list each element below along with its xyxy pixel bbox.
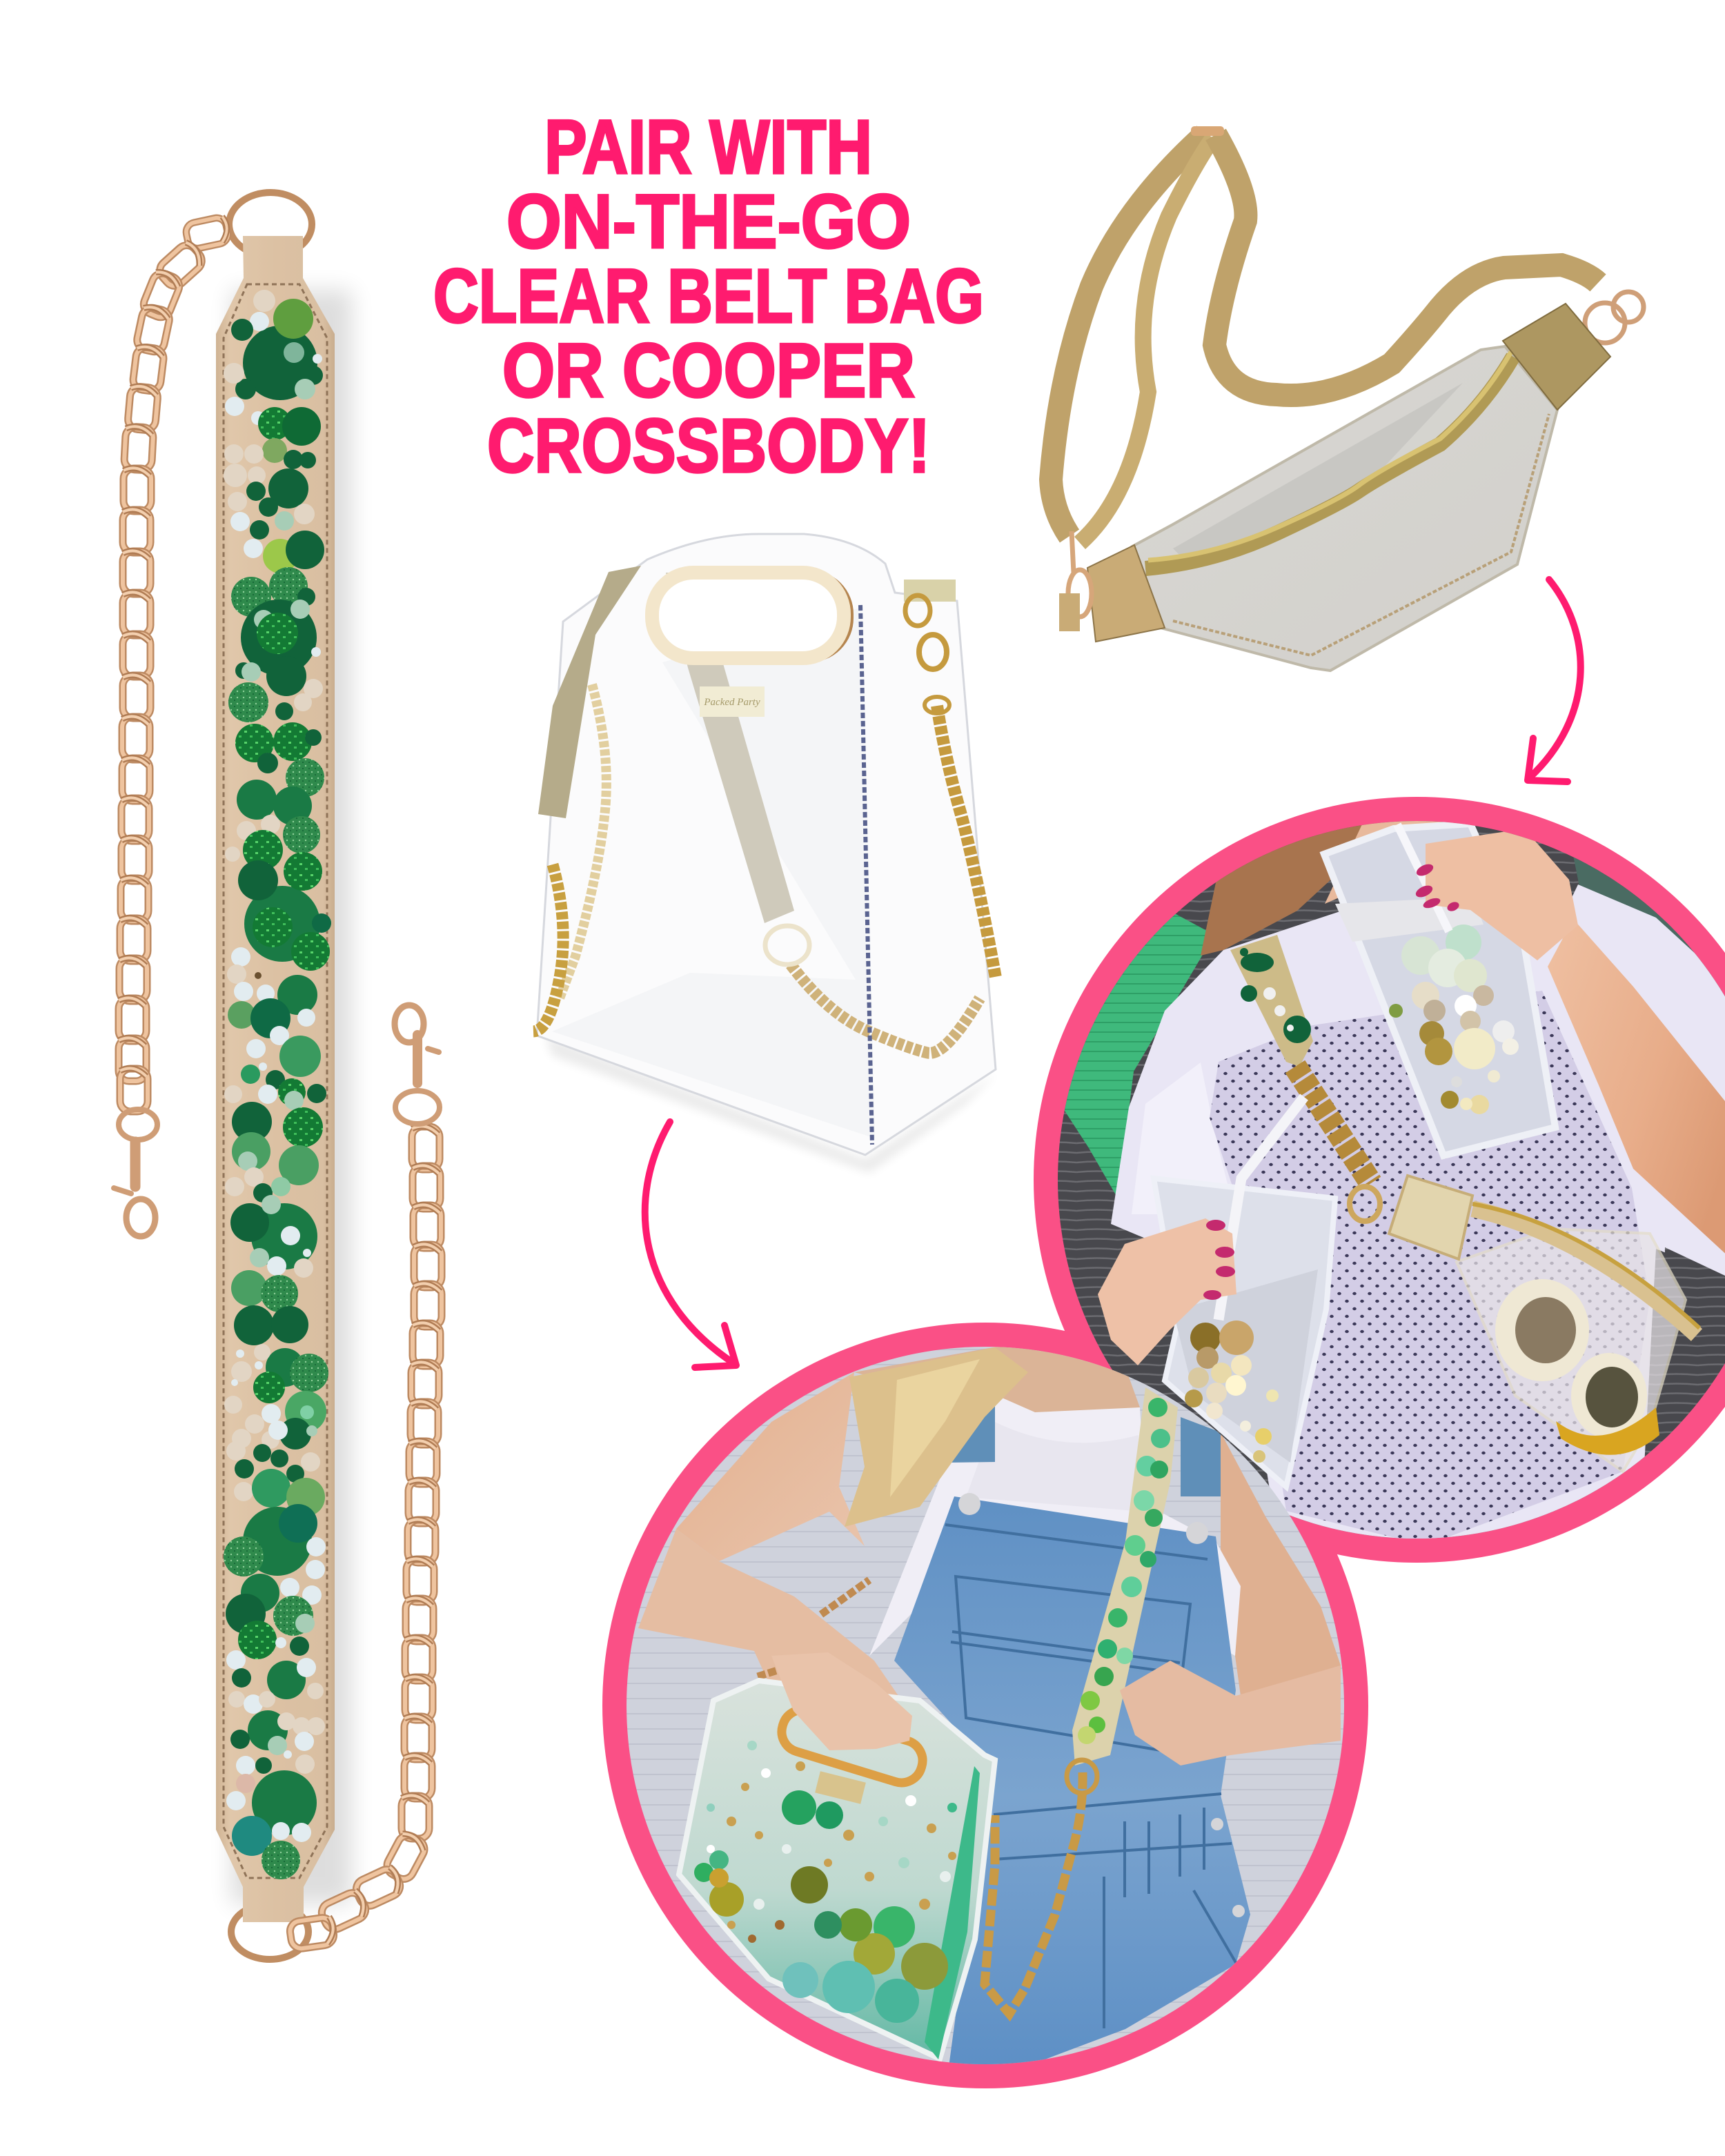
bottom ring <box>231 1904 308 1959</box>
right leather patch <box>1503 304 1610 410</box>
sequins confetti <box>224 290 331 1879</box>
green wall paint <box>1064 913 1206 1195</box>
bag inner reflection <box>552 607 875 1138</box>
lower chain clasp <box>395 1005 440 1124</box>
sunglasses <box>1495 1279 1647 1438</box>
pouch reflection <box>1173 1269 1318 1463</box>
top ring <box>229 192 312 256</box>
worn zipper <box>1472 1209 1697 1335</box>
waistband <box>994 1794 1242 2028</box>
strap ring <box>765 926 809 965</box>
zipper <box>1145 352 1513 568</box>
teal wall top right <box>1573 857 1725 996</box>
right hand on strap <box>1120 1661 1341 1766</box>
top hand <box>1426 829 1578 960</box>
photo: clear bag lifestyle <box>607 1332 1366 2097</box>
lower chain <box>289 1126 442 1950</box>
shirt fold <box>1132 1062 1235 1214</box>
worn strap confetti <box>1240 948 1311 1043</box>
right strap tab and clasp <box>904 580 956 713</box>
top pouch <box>1324 824 1555 1156</box>
inner reflection <box>1173 383 1463 562</box>
straw bottom <box>1219 1097 1304 1320</box>
bag shadow <box>545 1035 997 1173</box>
overall buckles <box>958 1493 1245 1917</box>
left denim strap <box>942 1394 995 1463</box>
top pouch seal <box>1335 897 1483 942</box>
top nails <box>1416 864 1459 911</box>
strap inner loop <box>1080 138 1213 543</box>
zipper teeth <box>1472 1204 1699 1328</box>
strap drop shadow <box>231 290 352 1904</box>
bag clear body <box>537 534 996 1155</box>
hair <box>845 1347 1028 1527</box>
worn chain <box>985 1772 1083 2014</box>
lower seam <box>1173 414 1549 655</box>
right chain <box>937 706 996 978</box>
product: confetti strap with chain <box>114 192 442 1959</box>
neck <box>1325 821 1475 904</box>
bag logo tag <box>700 686 765 717</box>
title: PAIR WITH <box>544 105 872 190</box>
overalls <box>894 1496 1250 2097</box>
worn strap <box>1230 935 1313 1067</box>
hair highlight <box>890 1359 980 1497</box>
upper chain clasp <box>114 1109 157 1236</box>
belt bag worn <box>1457 1229 1686 1472</box>
bag glitter confetti <box>694 1741 957 2023</box>
hair <box>1201 814 1387 956</box>
mesh panel <box>1210 991 1650 1545</box>
arrow: belt bag to photo <box>1528 580 1581 782</box>
hand on handle <box>771 1652 912 1750</box>
gold beads <box>1556 1407 1659 1455</box>
ring <box>1350 1187 1380 1221</box>
front chain <box>791 965 980 1053</box>
worn strap sequins <box>1078 1398 1170 1744</box>
lower hand <box>1098 1218 1236 1365</box>
wall <box>607 1332 1366 2084</box>
clear bag <box>679 1681 995 2059</box>
bag body <box>1132 346 1557 671</box>
forearm left <box>638 1529 912 1750</box>
white tank <box>869 1392 1241 1656</box>
worn confetti strap <box>1072 1387 1178 1766</box>
wood wall <box>1058 821 1725 1539</box>
pouch confetti bottom <box>1185 1321 1279 1463</box>
title: CLEAR BELT BAG <box>433 254 984 339</box>
bib pocket <box>945 1525 1208 1752</box>
title <box>433 105 984 488</box>
arrow: clear bag to photo <box>645 1122 736 1367</box>
back strap <box>666 573 794 923</box>
back chain <box>758 1580 869 1677</box>
strap ring <box>1067 1760 1097 1793</box>
right rings <box>1585 292 1644 343</box>
right wood lower <box>1661 1247 1725 1463</box>
bag handle <box>777 1705 927 1788</box>
bag side seam <box>860 605 872 1145</box>
worn chain <box>1295 1067 1371 1183</box>
left clasp <box>1059 531 1092 631</box>
strap long span <box>1214 135 1598 395</box>
lower pouch <box>1154 1178 1335 1487</box>
lower nails <box>1203 1220 1235 1300</box>
left leather patch <box>1087 545 1165 642</box>
right arm upper <box>1221 1432 1341 1696</box>
strap leather body <box>216 236 335 1922</box>
title: ON-THE-GO <box>506 179 911 264</box>
product: clear crossbody bag <box>533 534 997 1173</box>
left chain <box>533 864 563 1031</box>
tank ribbing shade <box>966 1421 1138 1511</box>
shirt <box>1111 884 1725 1573</box>
top pouch confetti <box>1389 924 1519 1114</box>
bag tag <box>815 1771 866 1804</box>
top background skin and neck <box>854 1345 1140 1417</box>
title: OR COOPER <box>502 328 915 413</box>
bag logo tag: Packed Party <box>703 697 760 708</box>
rear chain <box>560 684 607 998</box>
photo frame rings <box>602 797 1725 2088</box>
photo: belt bag lifestyle <box>1058 821 1725 1539</box>
arm <box>1548 919 1725 1266</box>
right denim strap <box>1181 1417 1221 1496</box>
upper chain <box>119 216 230 1111</box>
green side seam <box>925 1766 980 2059</box>
bag handle <box>652 573 851 660</box>
strap outer loop <box>1051 135 1205 536</box>
product: clear belt bag <box>1051 126 1644 671</box>
title: CROSSBODY! <box>487 404 930 488</box>
left shoulder strap <box>538 566 641 818</box>
worn gold patch <box>1389 1176 1472 1259</box>
top buckle <box>1191 126 1224 136</box>
straw top <box>1397 824 1449 931</box>
strap stitching <box>224 284 327 1878</box>
upper arm left <box>676 1372 865 1561</box>
